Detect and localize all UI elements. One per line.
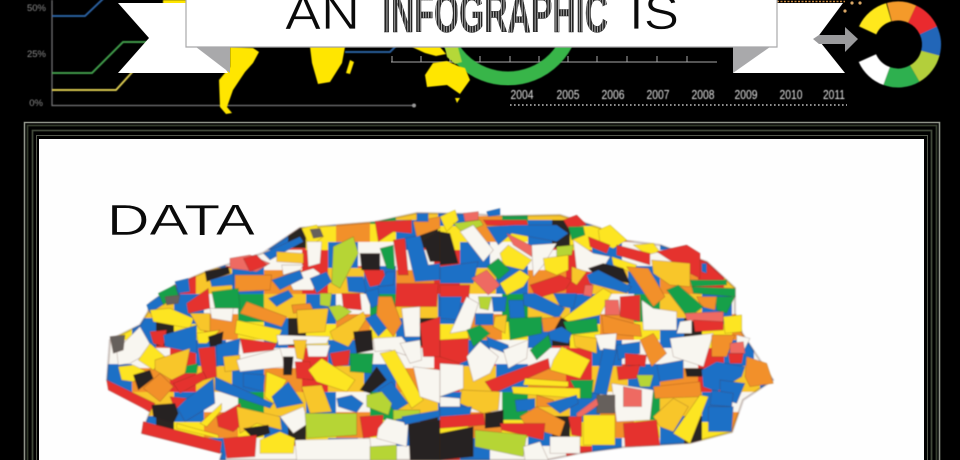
- donut chart: [852, 0, 944, 90]
- year labels: 2005: [556, 87, 580, 102]
- panel frame: [24, 122, 940, 460]
- year labels: [510, 87, 845, 102]
- year labels: 2006: [602, 87, 624, 102]
- green ring chart: [442, 0, 574, 78]
- icon: grey arrow: [813, 27, 858, 52]
- title banner: [186, 0, 777, 47]
- left ribbon: [118, 3, 230, 73]
- year labels: 2007: [646, 87, 670, 102]
- white data panel: [39, 139, 924, 460]
- axis with ticks behind the ring: [391, 56, 717, 62]
- year labels: 2009: [734, 87, 758, 102]
- orange dotted accents: [777, 1, 862, 13]
- right ribbon: [733, 3, 845, 73]
- world map: yellow continents: [163, 0, 470, 114]
- year labels: 2010: [780, 87, 802, 102]
- line chart: percentage axis and trend lines: 50%: [27, 3, 47, 14]
- year labels: 2008: [692, 87, 714, 102]
- heading: DATA: DATA: [107, 196, 256, 245]
- line chart: percentage axis and trend lines: [27, 0, 416, 109]
- year labels: 2011: [823, 87, 845, 102]
- year labels: 2004: [510, 87, 534, 102]
- lego brick pile: [107, 208, 773, 460]
- line chart: percentage axis and trend lines: 25%: [27, 49, 47, 60]
- dotted timeline: [510, 104, 847, 106]
- line chart: percentage axis and trend lines: 0%: [29, 98, 44, 109]
